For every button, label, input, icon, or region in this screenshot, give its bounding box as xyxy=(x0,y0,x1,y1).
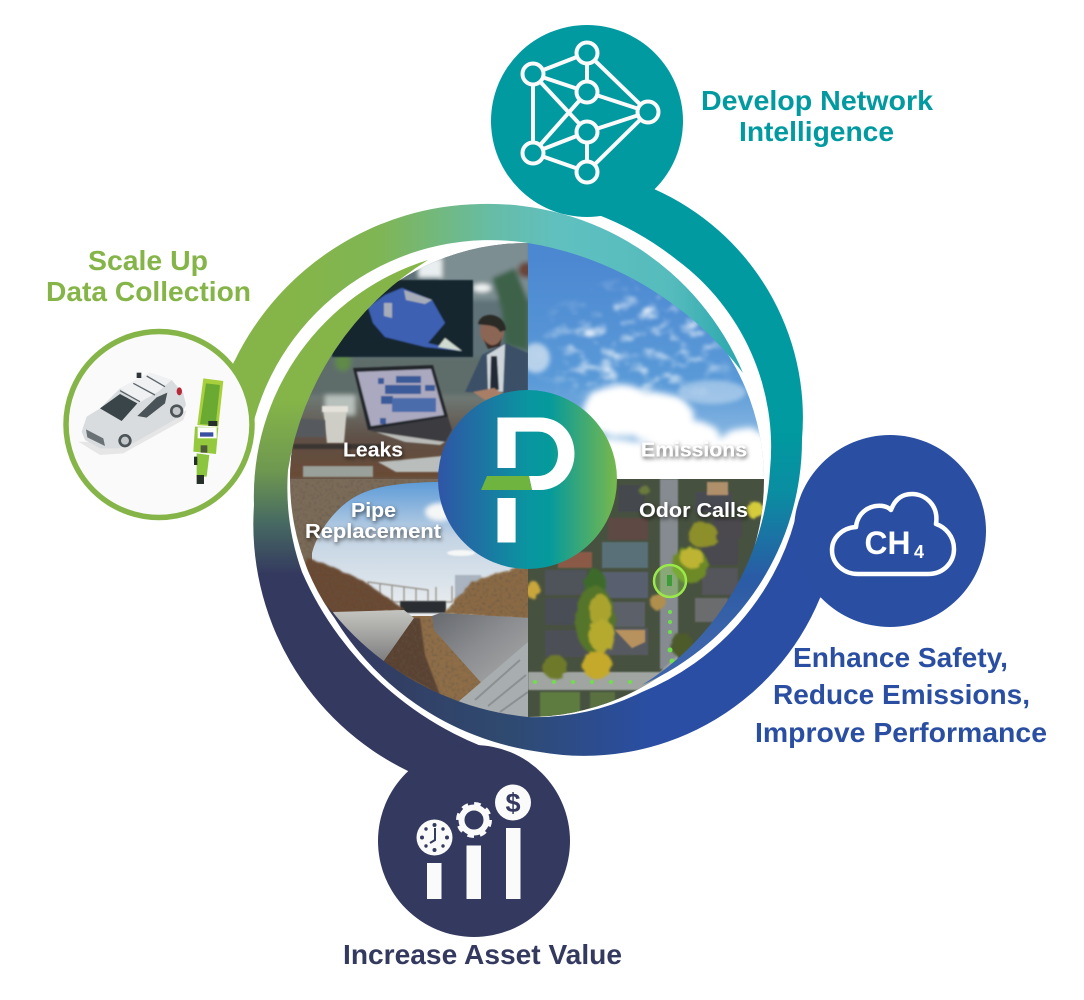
heading: Increase Asset Value: Increase Asset Value xyxy=(343,939,622,970)
teal swoosh band xyxy=(596,189,803,685)
photo: Leaks office xyxy=(285,238,534,480)
navy swoosh from lower bubble round left side xyxy=(253,260,524,841)
logo letter P xyxy=(498,418,574,490)
icon: growth bars with clock, gear and dollar xyxy=(416,784,531,899)
heading: Enhance Safety xyxy=(755,642,1047,748)
heading: Enhance Safety: Enhance Safety, xyxy=(793,642,1008,673)
blue swoosh band xyxy=(327,520,880,756)
icon: CH4 cloud xyxy=(832,494,954,574)
high cirrus wisps xyxy=(543,280,731,396)
heading: Enhance Safety: Reduce Emissions, xyxy=(773,679,1030,710)
blue bubble xyxy=(794,435,986,627)
houses xyxy=(545,482,742,657)
teal swoosh and bubble: Develop Network Intelligence xyxy=(491,25,803,685)
heading: Develop Network Intelligence: Intelligence xyxy=(739,116,894,147)
CH4 label: CH xyxy=(864,525,910,561)
CH4 label: 4 xyxy=(914,542,924,562)
quadrant label: Pipe Replacement xyxy=(305,500,441,543)
laptop xyxy=(353,365,452,445)
screen with map xyxy=(332,280,473,357)
photo: Emissions sky xyxy=(528,243,764,478)
roads xyxy=(528,479,678,722)
icon: handheld sensor xyxy=(193,378,223,484)
bars xyxy=(427,828,520,899)
quadrant label: Pipe Replacement: Pipe xyxy=(351,500,396,522)
heading: Develop Network Intelligence xyxy=(701,85,933,147)
icon: survey car xyxy=(78,373,187,455)
quadrant label: Pipe Replacement: Replacement xyxy=(305,521,441,543)
green circle: vehicle and sensor xyxy=(66,332,252,518)
heading: Develop Network Intelligence: Develop Network xyxy=(701,85,933,116)
photo: Pipe Replacement xyxy=(285,479,532,722)
sky opening xyxy=(312,482,530,620)
trees xyxy=(526,485,763,679)
coffee cup xyxy=(322,406,348,443)
blue swoosh and bubble: Enhance Safety xyxy=(327,435,986,756)
quadrant label: Odor Calls: Odor Calls xyxy=(639,500,748,522)
heading: Scale Up Data Collection xyxy=(46,245,251,307)
logo stem xyxy=(498,498,516,542)
dirt mounds xyxy=(295,558,532,620)
corrugated pipe xyxy=(458,642,528,717)
panel: photo circle quadrants xyxy=(285,238,771,722)
quadrant label: Leaks: Leaks xyxy=(343,440,403,462)
gear xyxy=(458,804,490,836)
dollar coin: $ xyxy=(505,788,521,818)
central P logo xyxy=(438,390,617,569)
person xyxy=(465,315,528,400)
heading: Scale Up Data Collection: Data Collection xyxy=(46,276,251,307)
clock xyxy=(416,820,452,856)
photo: Odor Calls aerial xyxy=(526,479,771,722)
teal bubble xyxy=(491,25,683,217)
right pipe xyxy=(432,613,530,687)
cumulus cloud xyxy=(584,384,771,490)
heading: Scale Up Data Collection: Scale Up xyxy=(88,245,208,276)
quadrant label: Emissions: Emissions xyxy=(641,440,747,462)
trench floor xyxy=(384,616,480,702)
left pipe xyxy=(333,610,414,662)
route dots xyxy=(533,610,674,684)
building and fence xyxy=(368,575,481,613)
green detection circle xyxy=(654,565,686,597)
table items xyxy=(293,418,442,477)
icon: network graph xyxy=(522,42,658,182)
navy bubble xyxy=(378,745,570,937)
logo bar xyxy=(481,476,532,490)
heading: Enhance Safety: Improve Performance xyxy=(755,717,1047,748)
green swoosh xyxy=(200,204,743,440)
